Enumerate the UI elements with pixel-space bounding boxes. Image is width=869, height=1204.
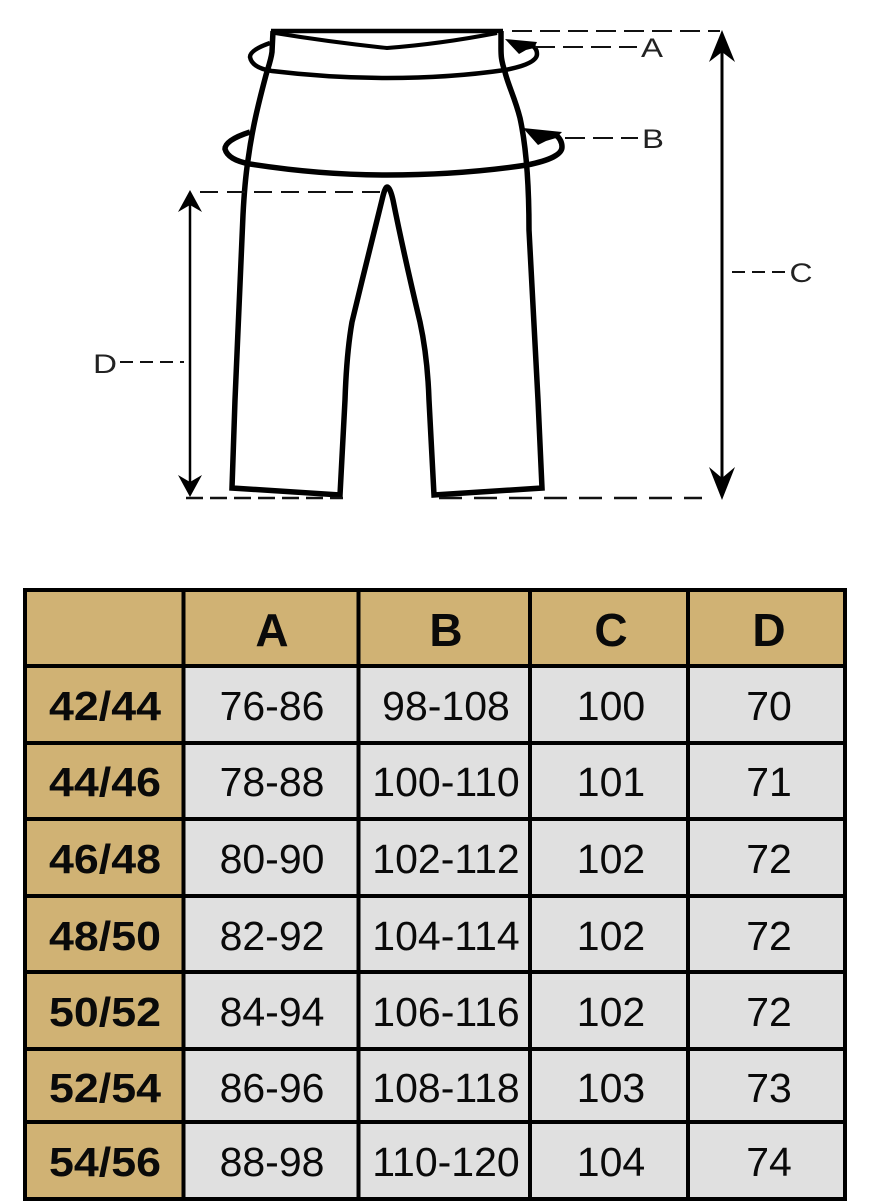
- row 52/54: 103: [577, 1065, 645, 1111]
- row 52/54: 52/54: [49, 1065, 161, 1111]
- row 46/48: 80-90: [220, 836, 324, 882]
- label B: B: [642, 124, 664, 154]
- row 52/54: 86-96: [220, 1065, 324, 1111]
- row 42/44: [49, 683, 792, 729]
- row 46/48: 102: [577, 836, 645, 882]
- hip measuring loop: [225, 128, 562, 175]
- trousers outline: [232, 31, 542, 495]
- diagram: trousers with measurements: [93, 30, 812, 500]
- row 50/52: 50/52: [49, 989, 161, 1035]
- table grid: [23, 588, 847, 1201]
- row 42/44: 100: [577, 683, 645, 729]
- row 46/48: 102-112: [372, 836, 520, 882]
- row 54/56: 54/56: [49, 1139, 161, 1185]
- row 46/48: 46/48: [49, 836, 161, 882]
- row 54/56: 104: [577, 1139, 645, 1185]
- label D: D: [93, 349, 117, 379]
- label A: A: [641, 33, 663, 63]
- row 48/50: 104-114: [372, 913, 520, 959]
- row 50/52: 84-94: [220, 989, 324, 1035]
- header row: [255, 604, 786, 656]
- row 42/44: 70: [746, 683, 792, 729]
- header row: D: [752, 604, 786, 656]
- row 54/56: 88-98: [220, 1139, 324, 1185]
- row 50/52: 106-116: [372, 989, 520, 1035]
- row 42/44: 76-86: [220, 683, 324, 729]
- table background: [25, 590, 845, 1199]
- row 44/46: [49, 759, 792, 805]
- row 48/50: 72: [746, 913, 792, 959]
- row 52/54: 108-118: [372, 1065, 520, 1111]
- size table: [23, 588, 847, 1201]
- header row: C: [594, 604, 628, 656]
- row 44/46: 101: [577, 759, 645, 805]
- row 50/52: 102: [577, 989, 645, 1035]
- row 42/44: 98-108: [382, 683, 510, 729]
- row 48/50: [49, 913, 792, 959]
- dashed guide lines: [120, 31, 786, 498]
- row 52/54: 73: [746, 1065, 792, 1111]
- row 48/50: 48/50: [49, 913, 161, 959]
- waist measuring loop: [250, 39, 537, 78]
- row 42/44: 42/44: [49, 683, 161, 729]
- arrow D: inseam: [178, 190, 202, 497]
- row 48/50: 102: [577, 913, 645, 959]
- row 44/46: 100-110: [372, 759, 520, 805]
- row 54/56: 110-120: [372, 1139, 520, 1185]
- row 52/54: [49, 1065, 792, 1111]
- row 50/52: [49, 989, 792, 1035]
- row 54/56: [49, 1139, 792, 1185]
- row 54/56: 74: [746, 1139, 792, 1185]
- label C: C: [790, 258, 812, 288]
- arrow C: total length: [709, 30, 735, 500]
- row 46/48: 72: [746, 836, 792, 882]
- row 50/52: 72: [746, 989, 792, 1035]
- row 46/48: [49, 836, 792, 882]
- row 44/46: 44/46: [49, 759, 161, 805]
- row 48/50: 82-92: [220, 913, 324, 959]
- header row: B: [429, 604, 463, 656]
- header row: A: [255, 604, 289, 656]
- row 44/46: 71: [746, 759, 792, 805]
- row 44/46: 78-88: [220, 759, 324, 805]
